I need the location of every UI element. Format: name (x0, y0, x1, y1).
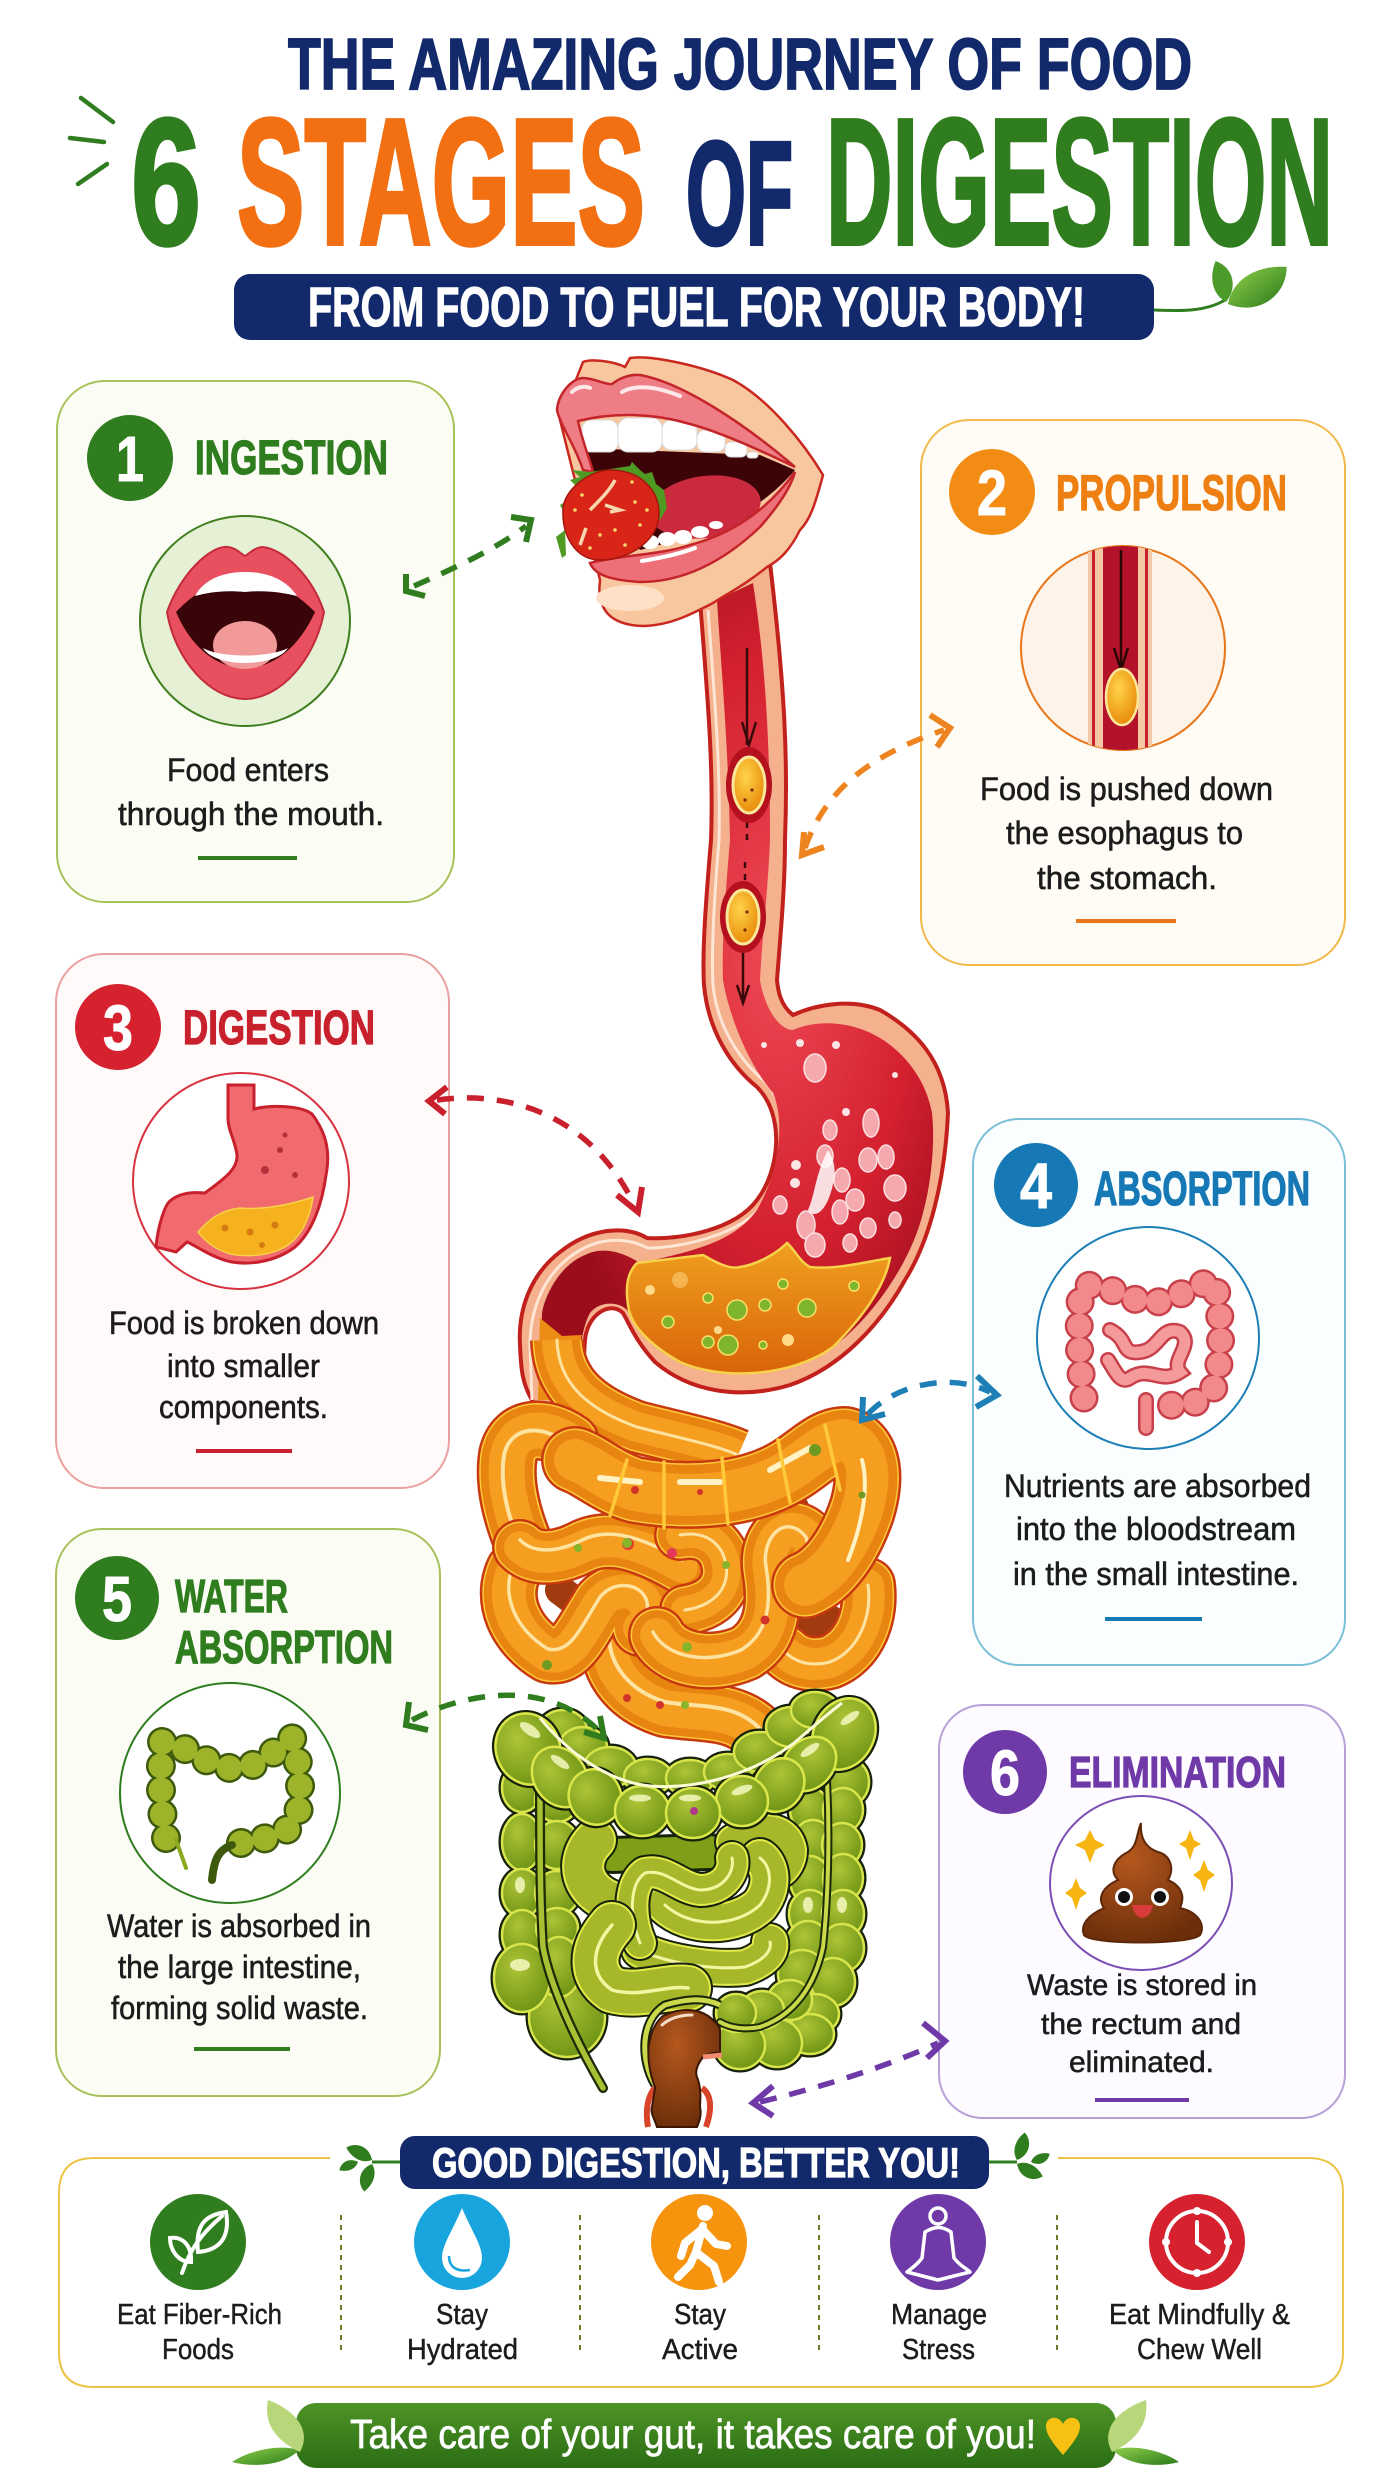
heading: WATER (175, 1570, 288, 1622)
number badge 1 (87, 415, 173, 501)
sparkle lines (70, 98, 113, 184)
number badge 4: 4 (1020, 1150, 1052, 1222)
icon: pink intestines (1037, 1227, 1259, 1449)
description (109, 1305, 379, 1425)
rectum and anal canal (645, 2000, 722, 2127)
panel: good digestion tips (59, 2132, 1343, 2387)
description: in the small intestine. (1013, 1556, 1299, 1592)
description: Food is broken down (109, 1305, 379, 1341)
tips banner: GOOD DIGESTION, BETTER YOU! (432, 2139, 960, 2186)
number badge 5: 5 (102, 1563, 132, 1635)
arrow: propulsion (802, 715, 950, 855)
footer banner (232, 2400, 1179, 2468)
description (1027, 1969, 1257, 2079)
inner green coils (583, 1831, 790, 1993)
tip: active (651, 2194, 747, 2290)
intestine food specks (542, 1444, 866, 1709)
lower teeth (641, 521, 723, 549)
number badge 6 (963, 1730, 1047, 1814)
description: into the bloodstream (1016, 1511, 1296, 1547)
panel: good digestion tips: Foods (162, 2334, 234, 2366)
panel: good digestion tips: Manage (891, 2299, 987, 2331)
number badge 6: 6 (990, 1737, 1020, 1809)
upper lip (557, 375, 795, 472)
tip: mindful (1149, 2194, 1245, 2290)
tip: hydrate (414, 2194, 510, 2290)
arrow: absorption (862, 1376, 997, 1420)
panel 2: propulsion (921, 420, 1345, 965)
food particles (662, 1279, 859, 1355)
description: components. (159, 1389, 328, 1425)
description: the esophagus to (1006, 815, 1243, 851)
description: the stomach. (1037, 860, 1217, 896)
description: into smaller (167, 1348, 320, 1384)
heading: PROPULSION (1056, 465, 1287, 521)
panel 1: ingestion (57, 381, 454, 902)
number badge 1: 1 (116, 423, 144, 495)
icon: smiling poop (1050, 1796, 1232, 1970)
description: Food is pushed down (980, 771, 1273, 807)
heading: ELIMINATION (1069, 1748, 1286, 1797)
panel: good digestion tips: Stay (436, 2299, 488, 2331)
number badge 2: 2 (977, 457, 1007, 529)
icon: banner right sprig (989, 2132, 1050, 2186)
icon: banner left sprig (339, 2138, 400, 2192)
panel: good digestion tips: Chew Well (1137, 2334, 1262, 2366)
anatomy: digestive tract (486, 357, 948, 2127)
description: through the mouth. (118, 796, 384, 832)
stomach acid chyme (627, 1243, 890, 1373)
heading: ABSORPTION (175, 1621, 393, 1673)
description: the rectum and (1041, 2008, 1241, 2041)
panel 3: digestion (56, 954, 449, 1488)
description (118, 752, 384, 832)
strawberry (556, 462, 667, 560)
appendix and taeniae (540, 1780, 828, 2088)
icon: green colon (120, 1683, 340, 1903)
footer message: Take care of your gut, it takes care of you! (350, 2411, 1036, 2457)
heading: INGESTION (195, 432, 388, 485)
panel: good digestion tips: Active (662, 2334, 738, 2366)
description: Nutrients are absorbed (1004, 1468, 1311, 1504)
food in duodenum (538, 1318, 582, 1400)
esophagus arrows (737, 648, 756, 1003)
description: forming solid waste. (111, 1990, 368, 2026)
sparkles (1065, 1830, 1215, 1910)
icon: esophagus cross-section (1021, 540, 1225, 760)
title line 2: OF (686, 112, 793, 276)
title line 2: 6 (131, 82, 201, 283)
food bolus 1 (726, 747, 772, 823)
icon: open mouth (140, 516, 350, 726)
panel: good digestion tips: Eat Mindfully & (1109, 2299, 1290, 2331)
upper teeth (582, 418, 758, 458)
heading (175, 1570, 393, 1673)
large intestine (486, 1687, 888, 2088)
description (980, 771, 1273, 896)
icon: left leaves (232, 2400, 304, 2465)
panel 5: water absorption (56, 1529, 440, 2096)
food bolus 2 (720, 881, 766, 953)
description (107, 1908, 371, 2026)
number badge 3 (75, 984, 161, 1070)
arrow: ingestion (406, 517, 531, 596)
panel 4: absorption (973, 1119, 1345, 1665)
header block (70, 25, 1333, 340)
icon: stomach (133, 1073, 349, 1289)
description: Water is absorbed in (107, 1908, 371, 1944)
title line 2: STAGES (237, 82, 645, 283)
dividers (341, 2215, 1057, 2355)
lower lip (590, 472, 795, 582)
subtitle banner (234, 274, 1154, 340)
stomach bubbles (773, 1054, 906, 1257)
heading: DIGESTION (183, 1002, 375, 1055)
panel: good digestion tips: Hydrated (407, 2334, 518, 2366)
small intestine (503, 1340, 869, 1735)
number badge 3: 3 (103, 992, 133, 1064)
icon: right leaves (1108, 2400, 1179, 2465)
icon: heart (1046, 2418, 1080, 2455)
number badge 2 (949, 449, 1035, 535)
tip: stress (890, 2194, 986, 2290)
description: the large intestine, (118, 1949, 361, 1985)
description (1004, 1468, 1311, 1592)
tongue (645, 469, 765, 545)
panel: good digestion tips: Stay (674, 2299, 726, 2331)
description: Food enters (167, 752, 329, 788)
icon: leaf sprig (1154, 261, 1292, 311)
panel: good digestion tips: Eat Fiber-Rich (117, 2299, 282, 2331)
number badge 4 (994, 1143, 1078, 1227)
highlights (510, 1708, 861, 1971)
panel 6: elimination (939, 1705, 1345, 2118)
title line 2 (131, 82, 1333, 283)
description: eliminated. (1069, 2046, 1214, 2079)
panel: good digestion tips: Stress (902, 2334, 975, 2366)
number badge 5 (75, 1556, 159, 1640)
stomach and esophagus (520, 563, 948, 1405)
arrow: digestion (429, 1087, 642, 1212)
description: Waste is stored in (1027, 1969, 1257, 2002)
arrow: elimination (753, 2023, 945, 2116)
arrow: water absorption (406, 1695, 604, 1738)
subtitle banner: FROM FOOD TO FUEL FOR YOUR BODY! (308, 275, 1085, 338)
tip: fiber (150, 2194, 246, 2290)
mouth with strawberry (556, 357, 823, 626)
